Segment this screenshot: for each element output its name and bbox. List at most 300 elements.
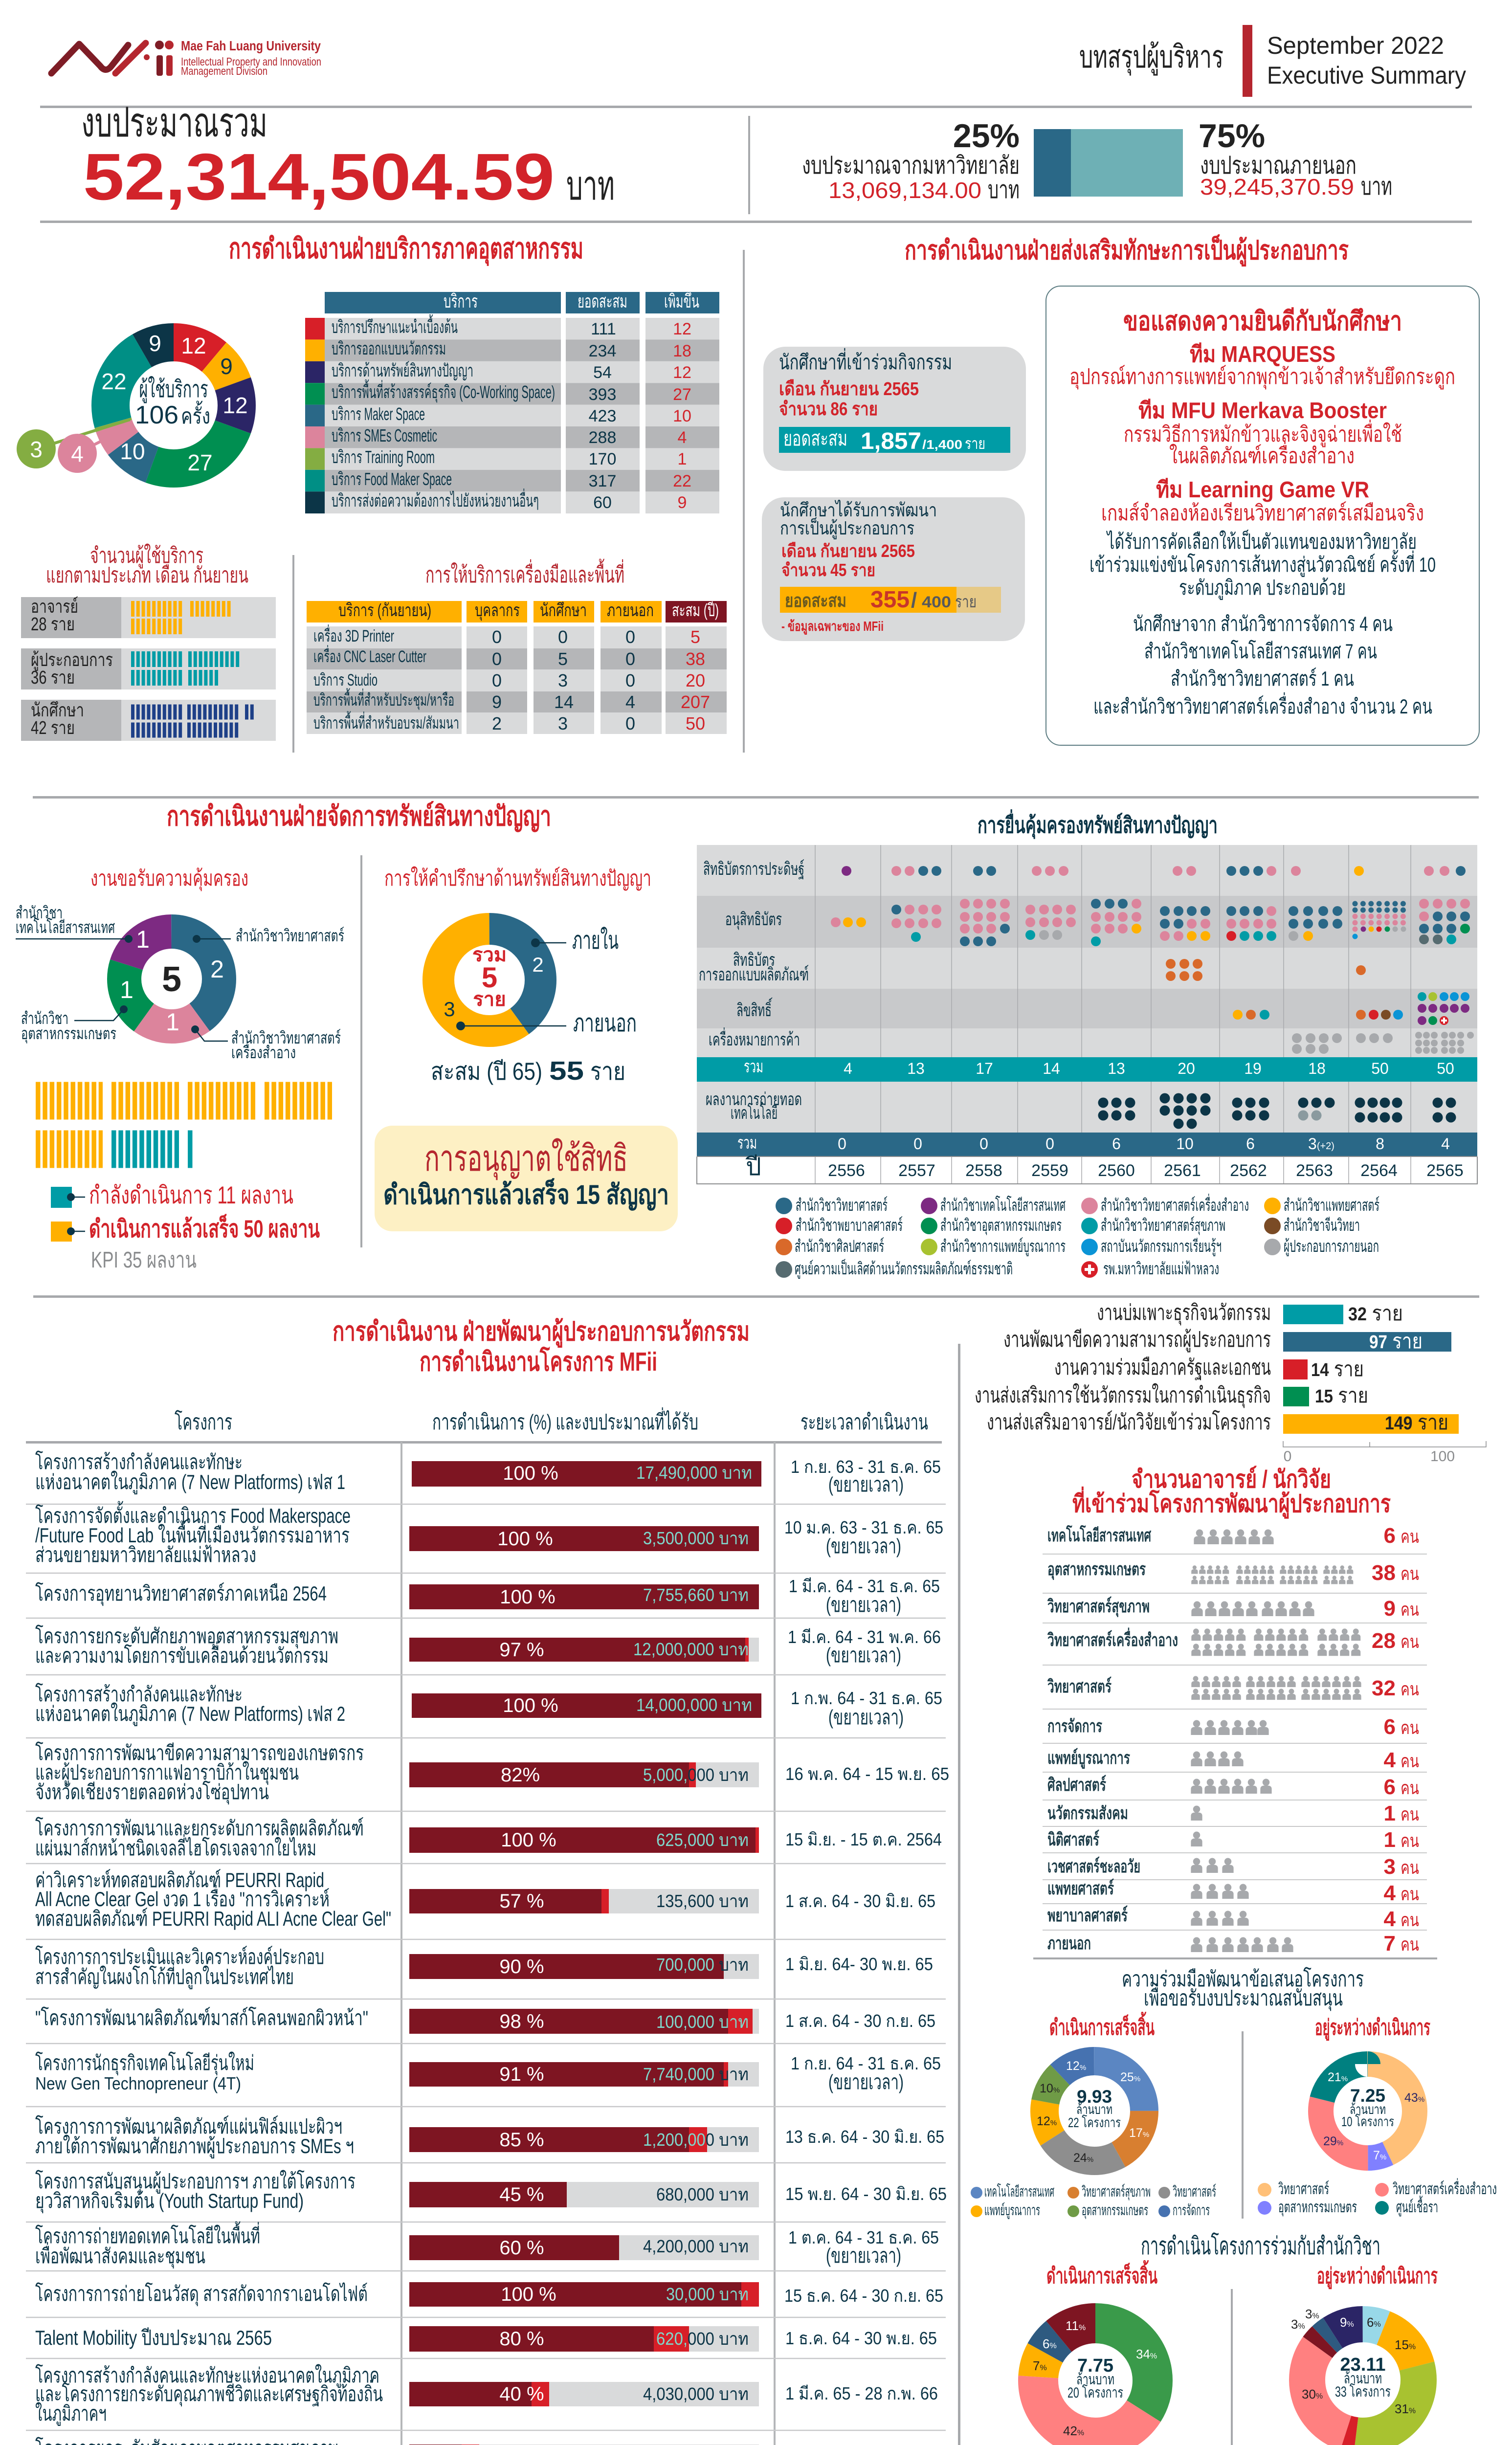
- table: IP filings: 18: [1308, 1060, 1326, 1077]
- panel: students developed: 400: [922, 593, 951, 611]
- panel: students developed: นักศึกษาได้รับการพัฒนา: [780, 500, 937, 521]
- project row 4: และความงามโดยการขับเคลื่อนด้วยนวัตกรรม: [35, 1642, 329, 1667]
- project row 6: 82%: [501, 1764, 540, 1786]
- heading: researchers: [1072, 1466, 1391, 1519]
- donut: protection requests: สำนักวิชาวิทยาศาสตร์: [231, 1029, 341, 1047]
- bar chart: entrepreneur support: งานพัฒนาขีดความสามารถผู้ประกอบการ: [1003, 1328, 1271, 1353]
- project row 15: โครงการการถ่ายโอนวัสดุ สารสกัดจากราเอนโดไฟต์: [35, 2282, 368, 2307]
- project row 16: 1 ธ.ค. 64 - 30 พ.ย. 65: [785, 2328, 937, 2348]
- project row 17: โครงการสร้างกำลังคนและทักษะแห่งอนาคตในภูมิภาค: [35, 2363, 379, 2388]
- panel: congratulations: นักศึกษาจาก สำนักวิชาการจัดการ 4 คน: [1133, 612, 1393, 635]
- pictogram: researcher counts: วิทยาศาสตร์สุขภาพ: [1047, 1596, 1150, 1618]
- pictogram: researcher counts: เวชศาสตร์ชะลอวัย: [1047, 1856, 1140, 1876]
- table: equipment: ภายนอก: [607, 600, 654, 620]
- table: IP filings: 0: [838, 1135, 846, 1153]
- project row 2: (ขยายเวลา): [826, 1534, 901, 1557]
- donut: joint in progress: ล้านบาท: [1344, 2371, 1382, 2387]
- legend: proposals completed: แพทย์บูรณาการ: [984, 2202, 1040, 2219]
- project row 4: 97 %: [499, 1639, 544, 1661]
- project row 4: 12,000,000 บาท: [633, 1639, 749, 1659]
- stripes: works count: [36, 1101, 332, 1149]
- pictogram: researcher counts: แพทย์บูรณาการ: [1047, 1748, 1130, 1769]
- dots: copyrights: [1233, 992, 1469, 1025]
- donut: joint in progress: 3%: [1291, 2317, 1305, 2332]
- table: equipment: บุคลากร: [475, 600, 520, 621]
- project row 14: [35, 2221, 939, 2269]
- donut: proposals completed: ล้านบาท: [1076, 2102, 1112, 2117]
- project row 12: 13 ธ.ค. 64 - 30 มิ.ย. 65: [785, 2127, 944, 2147]
- table: equipment: 0: [492, 670, 502, 690]
- table: IP filings: ปี: [745, 1153, 761, 1180]
- project row 4: [35, 1624, 941, 1667]
- legend: IP schools: [776, 1194, 1379, 1279]
- panel: congratulations: เกมส์จำลองห้องเรียนวิทยาศาสตร์เสมือนจริง: [1101, 501, 1424, 525]
- table: IP filings: 50: [1437, 1060, 1454, 1077]
- legend: proposals completed: [971, 2183, 1216, 2220]
- table: IP filings: 0: [979, 1135, 988, 1153]
- dots: invention patents: [842, 866, 1466, 876]
- donut: proposals completed: 10%: [1040, 2082, 1060, 2095]
- project row 7: แผ่นมาส์กหน้าชนิดเจลลี่ไฮโดรเจลจากใยไหม: [35, 1834, 316, 1860]
- project row 16: Talent Mobility ปีงบประมาณ 2565: [35, 2326, 272, 2349]
- project row 10: [35, 2006, 935, 2034]
- project row 10: 1 ส.ค. 64 - 30 ก.ย. 65: [785, 2011, 935, 2031]
- table: IP filings: 14: [1043, 1060, 1060, 1077]
- table: equipment: 0: [625, 627, 635, 647]
- panel: users entrepreneurs: [21, 648, 276, 689]
- table: equipment: 14: [554, 692, 574, 712]
- project row 9: สารสำคัญในผงโกโก้ที่ปลูกในประเทศไทย: [35, 1963, 294, 1989]
- table: services: 9: [678, 493, 687, 512]
- project row 2: [35, 1501, 943, 1566]
- pictogram: researcher counts: 6: [1384, 1715, 1396, 1739]
- budget split: 39,245,370.59: [1200, 174, 1354, 200]
- total budget: บาท: [566, 162, 615, 208]
- table: IP filings: 8: [1376, 1135, 1384, 1153]
- donut: proposals completed: 22 โครงการ: [1068, 2114, 1121, 2130]
- table: services: 54: [593, 363, 612, 382]
- panel: students developed: การเป็นผู้ประกอบการ: [780, 517, 914, 539]
- table: services: 170: [589, 450, 616, 468]
- table: services: บริการปรึกษาแนะนำเบื้องต้น: [332, 314, 458, 337]
- project row 12: โครงการการพัฒนาผลิตภัณฑ์แผ่นฟิล์มแปะผิวฯ: [35, 2114, 342, 2138]
- table: IP filings: อนุสิทธิบัตร: [725, 909, 782, 930]
- project row 12: ภายใต้การพัฒนาศักยภาพผู้ประกอบการ SMEs ฯ: [35, 2134, 354, 2158]
- table: IP filings: 2559: [1031, 1161, 1068, 1180]
- panel: congratulations: สำนักวิชาวิทยาศาสตร์ 1 คน: [1171, 667, 1354, 690]
- donut: proposals in progress: 7.25: [1350, 2086, 1385, 2106]
- dots: technology transfer: [1098, 1093, 1456, 1129]
- pictogram: researcher counts: 7: [1384, 1932, 1396, 1956]
- project row 4: 1 มี.ค. 64 - 31 พ.ค. 66: [788, 1627, 941, 1647]
- project row 8: All Acne Clear Gel งวด 1 เรื่อง "การวิเคราะห์: [35, 1885, 330, 1911]
- table: services: 288: [589, 428, 616, 447]
- legend: works status: [51, 1181, 320, 1272]
- panel: students developed: เดือน กันยายน 2565: [781, 541, 915, 561]
- budget split: 25%: [953, 117, 1020, 155]
- panel: students developed: 355: [870, 587, 910, 613]
- project row 11: [35, 2051, 941, 2093]
- legend: works status: กำลังดำเนินการ 11 ผลงาน: [89, 1181, 293, 1209]
- project row 4: โครงการยกระดับศักยภาพอุตสาหกรรมสุขภาพ: [35, 1624, 338, 1649]
- donut: proposals in progress: 29%: [1323, 2134, 1343, 2148]
- table: services: บริการออกแบบนวัตกรรม: [332, 338, 446, 358]
- table: services: 1: [678, 450, 687, 468]
- donut: proposals completed: 17%: [1129, 2126, 1149, 2140]
- pictogram: researcher counts: คน: [1401, 1600, 1419, 1620]
- bar chart: entrepreneur support: งานบ่มเพาะธุรกิจนวัตกรรม: [1097, 1301, 1271, 1326]
- legend: IP schools: สถาบันนวัตกรรมการเรียนรู้ฯ: [1101, 1237, 1222, 1256]
- table: IP filings: สิทธิบัตร: [733, 950, 775, 970]
- bar chart: entrepreneur support: 32 ราย: [1348, 1302, 1403, 1325]
- panel: students joining activities: /1,400: [922, 437, 962, 452]
- project row 11: New Gen Technopreneur (4T): [35, 2073, 241, 2093]
- table: IP filings: 4: [1441, 1135, 1450, 1153]
- donut: joint completed: ล้านบาท: [1076, 2372, 1114, 2388]
- project row 7: [35, 1816, 942, 1860]
- donut: protection requests: 1: [120, 976, 133, 1003]
- project row 11: 7,740,000 บาท: [643, 2064, 749, 2084]
- project row 5: 14,000,000 บาท: [636, 1695, 752, 1715]
- table: IP filings: 2556: [828, 1161, 865, 1180]
- table: IP filings: ผลงานการถ่ายทอด: [706, 1089, 802, 1109]
- donut: service users: 3: [30, 437, 43, 462]
- table: IP filings: 2562: [1230, 1161, 1267, 1180]
- project row 3: 100 %: [500, 1586, 556, 1608]
- total budget: [81, 99, 615, 214]
- project row 9: [35, 1945, 933, 1989]
- table: IP filings: 50: [1371, 1060, 1389, 1077]
- donut: joint completed: 6%: [1043, 2336, 1057, 2351]
- panel: students joining activities: จำนวน 86 ราย: [779, 399, 878, 420]
- project row 5: โครงการสร้างกำลังคนและทักษะ: [35, 1682, 243, 1706]
- callout: licensing: ดำเนินการแล้วเสร็จ 15 สัญญา: [383, 1178, 669, 1211]
- donut: protection requests: เครื่องสำอาง: [231, 1041, 296, 1062]
- donut: service users: 9: [149, 331, 161, 356]
- bar chart: entrepreneur support: [975, 1301, 1486, 1465]
- project row 8: 1 ส.ค. 64 - 30 มิ.ย. 65: [785, 1891, 935, 1911]
- project row 8: 57 %: [499, 1890, 544, 1912]
- heading: users by type: จำนวนผู้ใช้บริการ: [90, 543, 203, 569]
- subheadings: proposals status: อยู่ระหว่างดำเนินการ: [1315, 2016, 1430, 2041]
- bar chart: entrepreneur support: 14 ราย: [1311, 1357, 1364, 1380]
- donut: service users: 27: [187, 450, 213, 475]
- table: IP filings: 13: [907, 1060, 925, 1077]
- donut: service users: 9: [220, 354, 233, 379]
- pictogram: researcher counts: นิติศาสตร์: [1047, 1829, 1099, 1849]
- panel: congratulations: ในผลิตภัณฑ์เครื่องสำอาง: [1169, 441, 1355, 468]
- legend: works status: ดำเนินการแล้วเสร็จ 50 ผลงาน: [89, 1214, 320, 1243]
- donut: protection requests: สำนักวิชา: [21, 1009, 68, 1028]
- table: services: 27: [673, 385, 691, 404]
- donut: protection requests: อุตสาหกรรมเกษตร: [21, 1024, 116, 1044]
- project row 7: 15 มิ.ย. - 15 ต.ค. 2564: [785, 1829, 942, 1849]
- table: IP filings: 2564: [1360, 1161, 1398, 1180]
- table: equipment: บริการพื้นที่สำหรับประชุม/หารือ: [313, 688, 454, 710]
- pictogram: researcher counts: คน: [1401, 1527, 1419, 1547]
- project row 12: 1,200,000 บาท: [643, 2130, 749, 2150]
- table: equipment: สะสม (ปี): [672, 600, 719, 620]
- bar chart: entrepreneur support: 97 ราย: [1369, 1330, 1423, 1353]
- table: IP filings: 2563: [1296, 1161, 1333, 1180]
- donut: service users: [17, 331, 248, 475]
- total budget: 52,314,504.59: [83, 140, 555, 214]
- budget split: บาท: [988, 176, 1020, 203]
- project row 6: [35, 1741, 949, 1805]
- donut: joint completed: 42%: [1063, 2423, 1084, 2438]
- project row 7: 100 %: [501, 1829, 556, 1851]
- header logo: Mae Fah Luang University: [181, 38, 321, 53]
- pictogram: researcher counts: คน: [1401, 1858, 1419, 1878]
- table header: projects: [175, 1407, 928, 1434]
- table: services: บริการ Food Maker Space: [332, 469, 452, 489]
- project row 17: 4,030,000 บาท: [643, 2384, 749, 2404]
- project row 1: 1 ก.ย. 63 - 31 ธ.ค. 65: [791, 1457, 941, 1477]
- project row 17: 40 %: [499, 2383, 544, 2405]
- pictogram: researcher counts: คน: [1401, 1718, 1419, 1738]
- project row 11: 1 ก.ย. 64 - 31 ธ.ค. 65: [791, 2053, 941, 2073]
- dots: trademarks: [1292, 1032, 1474, 1054]
- project row 17: 1 มี.ค. 65 - 28 ก.พ. 66: [785, 2383, 938, 2403]
- donut: protection requests: 1: [166, 1008, 179, 1036]
- dots: design patents: [1166, 959, 1366, 981]
- donut: IP consulting: 55: [549, 1056, 584, 1086]
- heading: innovation entrepreneurs: [333, 1317, 750, 1377]
- table: IP filings: 10: [1176, 1135, 1194, 1153]
- panel: students developed: ราย: [955, 593, 977, 611]
- heading: researchers: จำนวนอาจารย์ / นักวิจัย: [1132, 1466, 1331, 1493]
- table: IP filings: [697, 845, 1477, 1184]
- pictogram: researcher counts: 28: [1372, 1629, 1396, 1653]
- project row 2: ส่วนขยายมหาวิทยาลัยแม่ฟ้าหลวง: [35, 1543, 256, 1566]
- donut: proposals in progress: [1321, 2064, 1424, 2162]
- project row 11: 91 %: [499, 2064, 544, 2085]
- panel: users teachers: [21, 596, 276, 638]
- header title: Executive Summary: [1267, 62, 1466, 89]
- project row 5: 1 ก.พ. 64 - 31 ธ.ค. 65: [791, 1688, 942, 1708]
- donut: joint completed: 7.75: [1077, 2356, 1113, 2376]
- table: IP filings: ลิขสิทธิ์: [736, 997, 773, 1020]
- project row 8: [35, 1868, 935, 1930]
- table: IP filings: 17: [976, 1060, 993, 1077]
- project row 9: 700,000 บาท: [656, 1955, 749, 1975]
- pictogram: researcher counts: 38: [1372, 1561, 1396, 1585]
- donut: proposals completed: 12%: [1037, 2114, 1057, 2128]
- table: equipment: [307, 600, 727, 734]
- callout: licensing: การอนุญาตใช้สิทธิ: [424, 1138, 628, 1180]
- legend: proposals completed: เทคโนโลยีสารสนเทศ: [984, 2183, 1054, 2200]
- legend: IP schools: สำนักวิชาแพทยศาสตร์: [1284, 1196, 1379, 1215]
- table: equipment: 0: [625, 713, 635, 734]
- subheadings: proposals status: [1049, 2011, 1430, 2041]
- donut: joint completed: 11%: [1066, 2318, 1086, 2333]
- pictogram: researcher counts: 6: [1384, 1524, 1396, 1548]
- heading: equipment: การให้บริการเครื่องมือและพื้นที่: [425, 558, 624, 587]
- project row 4: (ขยายเวลา): [826, 1644, 901, 1667]
- donut: protection requests: 2: [210, 956, 224, 983]
- project row 9: 90 %: [499, 1956, 544, 1978]
- project row 2: 100 %: [497, 1528, 553, 1550]
- table: equipment: 3: [558, 713, 568, 734]
- table: services: 18: [673, 342, 691, 360]
- project row 6: 16 พ.ค. 64 - 15 พ.ย. 65: [785, 1764, 949, 1784]
- donut: IP consulting: 2: [532, 953, 544, 976]
- table: equipment: นักศึกษา: [540, 600, 587, 620]
- table: IP filings: 13: [1108, 1060, 1125, 1077]
- panel: users teachers: อาจารย์: [31, 596, 78, 617]
- heading: protection applications: งานขอรับความคุ้มครอง: [90, 867, 248, 891]
- subheadings: joint status: ดำเนินการเสร็จสิ้น: [1046, 2260, 1157, 2288]
- donut: joint in progress: [1291, 2307, 1419, 2445]
- legend: IP schools: ศูนย์ความเป็นเลิศด้านนวัตกรรมผลิตภัณฑ์ธรรมชาติ: [795, 1259, 1013, 1279]
- bar chart: entrepreneur support: 0: [1284, 1448, 1291, 1465]
- donut: joint in progress: 23.11: [1340, 2355, 1386, 2375]
- donut: joint in progress: 33 โครงการ: [1335, 2383, 1391, 2400]
- header logo: [51, 38, 321, 77]
- panel: students developed: ยอดสะสม: [785, 591, 846, 611]
- donut: proposals completed: 12%: [1066, 2059, 1086, 2073]
- heading: users by type: [46, 543, 248, 587]
- legend: IP schools: ผู้ประกอบการภายนอก: [1284, 1237, 1379, 1256]
- project row 16: 620,000 บาท: [656, 2329, 749, 2349]
- donut: service users: ครั้ง: [181, 400, 210, 428]
- panel: students joining activities: เดือน กันยายน 2565: [779, 379, 919, 400]
- pictogram: researcher counts: คน: [1401, 1910, 1419, 1931]
- table: equipment: 4: [625, 692, 635, 712]
- table: equipment: 9: [492, 692, 502, 712]
- donut: IP consulting: รวม: [472, 944, 507, 966]
- project row 1: (ขยายเวลา): [828, 1473, 904, 1496]
- bar chart: entrepreneur support: 15 ราย: [1315, 1384, 1368, 1407]
- table: IP filings: เทคโนโลยี: [731, 1103, 778, 1123]
- bar chart: entrepreneur support: 100: [1430, 1448, 1455, 1465]
- legend: proposals in progress: ศูนย์เชื้อรา: [1396, 2196, 1438, 2217]
- project row 15: [35, 2282, 943, 2307]
- table: services: 60: [593, 493, 612, 512]
- legend: IP schools: สำนักวิชาเทคโนโลยีสารสนเทศ: [940, 1196, 1066, 1215]
- panel: students joining activities: 1,857: [861, 428, 921, 454]
- donut: IP consulting: ภายใน: [572, 927, 619, 954]
- heading: IP consulting: การให้คำปรึกษาด้านทรัพย์สินทางปัญญา: [384, 866, 651, 890]
- legend: proposals completed: วิทยาศาสตร์สุขภาพ: [1082, 2183, 1151, 2201]
- project row 9: โครงการการประเมินและวิเคราะห์องค์ประกอบ: [35, 1945, 324, 1968]
- pictogram: researcher counts: คน: [1401, 1632, 1419, 1652]
- table: services: บริการ: [444, 291, 478, 312]
- table: services: 317: [589, 472, 616, 490]
- project row 14: โครงการถ่ายทอดเทคโนโลยีในพื้นที่: [35, 2221, 260, 2247]
- budget split: 13,069,134.00: [828, 178, 981, 203]
- project row 2: 3,500,000 บาท: [643, 1528, 749, 1548]
- donut: IP consulting: 3: [444, 998, 455, 1021]
- table: services: 22: [673, 472, 691, 490]
- panel: congratulations: ขอแสดงความยินดีกับนักศึกษา: [1123, 307, 1402, 336]
- table: IP filings: 2560: [1098, 1161, 1135, 1180]
- project row 12: 85 %: [499, 2129, 544, 2151]
- panel: users teachers: 28 ราย: [31, 614, 75, 635]
- pictogram: researcher counts: แพทยศาสตร์: [1047, 1878, 1114, 1898]
- project row 6: 5,000,000 บาท: [643, 1765, 749, 1785]
- bar chart: entrepreneur support: งานความร่วมมือภาครัฐและเอกชน: [1054, 1356, 1271, 1380]
- table: services: 10: [673, 407, 691, 425]
- legend: IP schools: สำนักวิชาพยาบาลศาสตร์: [796, 1216, 903, 1235]
- project row 1: [35, 1450, 941, 1496]
- project row 16: 80 %: [499, 2328, 544, 2350]
- header title: [1079, 25, 1466, 97]
- table: equipment: 0: [492, 627, 502, 647]
- project row 15: 30,000 บาท: [666, 2284, 749, 2304]
- table header: projects: การดำเนินการ (%) และงบประมาณที่ได้รับ: [432, 1407, 698, 1434]
- legend: IP schools: สำนักวิชาวิทยาศาสตร์: [796, 1196, 888, 1215]
- project row 7: 625,000 บาท: [656, 1830, 749, 1850]
- budget split: งบประมาณจากมหาวิทยาลัย: [802, 152, 1020, 179]
- donut: service users: 12: [181, 333, 206, 358]
- pictogram: researcher counts: 1: [1384, 1828, 1396, 1852]
- project row 5: [35, 1682, 942, 1729]
- legend: proposals in progress: อุตสาหกรรมเกษตร: [1278, 2198, 1357, 2217]
- project row 3: [35, 1576, 940, 1616]
- heading: IP filings: การยื่นคุ้มครองทรัพย์สินทางปัญญา: [978, 809, 1218, 839]
- panel: students developed: /: [911, 588, 917, 612]
- panel: congratulations: ทีม MFU Merkava Booster: [1138, 398, 1387, 423]
- table: IP filings: เครื่องหมายการค้า: [709, 1027, 800, 1049]
- project row 6: และผู้ประกอบการกาแฟอาราบิก้าในชุมชน: [35, 1761, 299, 1785]
- project row 13: ยุววิสาหกิจเริ่มต้น (Youth Startup Fund): [35, 2187, 304, 2214]
- heading: collaboration proposals: [1122, 1967, 1364, 2011]
- pictogram: researcher counts: เทคโนโลยีสารสนเทศ: [1047, 1525, 1152, 1545]
- legend: IP schools: สำนักวิชาวิทยาศาสตร์สุขภาพ: [1101, 1216, 1225, 1235]
- project row 11: โครงการนักธุรกิจเทคโนโลยีรุ่นใหม่: [35, 2051, 254, 2076]
- table: services: 234: [589, 342, 616, 360]
- pictogram: researcher counts: [1047, 1524, 1419, 1956]
- table: IP filings: 0: [913, 1135, 922, 1153]
- panel: users students: [21, 700, 276, 741]
- pictogram: researcher counts: คน: [1401, 1884, 1419, 1905]
- table: equipment: 38: [686, 649, 705, 669]
- table: IP filings: 2561: [1164, 1161, 1201, 1180]
- project row 5: 100 %: [503, 1695, 558, 1716]
- legend: IP schools: สำนักวิชาการแพทย์บูรณาการ: [940, 1237, 1066, 1256]
- donut: proposals completed: [1037, 2059, 1149, 2165]
- table: equipment: บริการพื้นที่สำหรับอบรม/สัมมนา: [313, 711, 459, 733]
- subheadings: joint status: [1046, 2260, 1438, 2289]
- donut: proposals in progress: 43%: [1404, 2091, 1424, 2105]
- table: services: บริการ Training Room: [332, 447, 435, 467]
- budget split: 75%: [1199, 117, 1265, 155]
- project row 5: (ขยายเวลา): [828, 1706, 904, 1729]
- legend: IP schools: สำนักวิชาอุตสาหกรรมเกษตร: [940, 1216, 1062, 1235]
- donut: IP consulting: ภายนอก: [573, 1009, 637, 1037]
- project row 17: [35, 2363, 938, 2426]
- table: services: 423: [589, 407, 616, 425]
- table: services: ยอดสะสม: [578, 291, 627, 312]
- project row 2: /Future Food Lab ในพื้นที่เมืองนวัตกรรมอาหาร: [35, 1520, 350, 1547]
- donut: service users: ผู้ใช้บริการ: [139, 376, 208, 403]
- project row 12: [35, 2114, 944, 2158]
- table: services: บริการส่งต่อความต้องการไปยังหน่วยงานอื่นๆ: [332, 489, 539, 511]
- table: equipment: 20: [686, 670, 705, 690]
- project row 7: โครงการการพัฒนาและยกระดับการผลิตผลิตภัณฑ์: [35, 1816, 364, 1840]
- heading: collaboration proposals: ความร่วมมือพัฒนาข้อเสนอโครงการ: [1122, 1967, 1364, 1991]
- table: equipment: 0: [558, 627, 568, 647]
- table: equipment: 3: [558, 670, 568, 690]
- project row 3: (ขยายเวลา): [826, 1593, 901, 1616]
- panel: congratulations: ทีม Learning Game VR: [1156, 477, 1369, 502]
- panel: congratulations: ระดับภูมิภาค ประกอบด้วย: [1179, 576, 1346, 600]
- donut: IP consulting: 5: [482, 962, 497, 994]
- pictogram: researcher counts: ศิลปศาสตร์: [1047, 1775, 1106, 1795]
- budget split: [802, 117, 1392, 203]
- table: services: 12: [673, 320, 691, 338]
